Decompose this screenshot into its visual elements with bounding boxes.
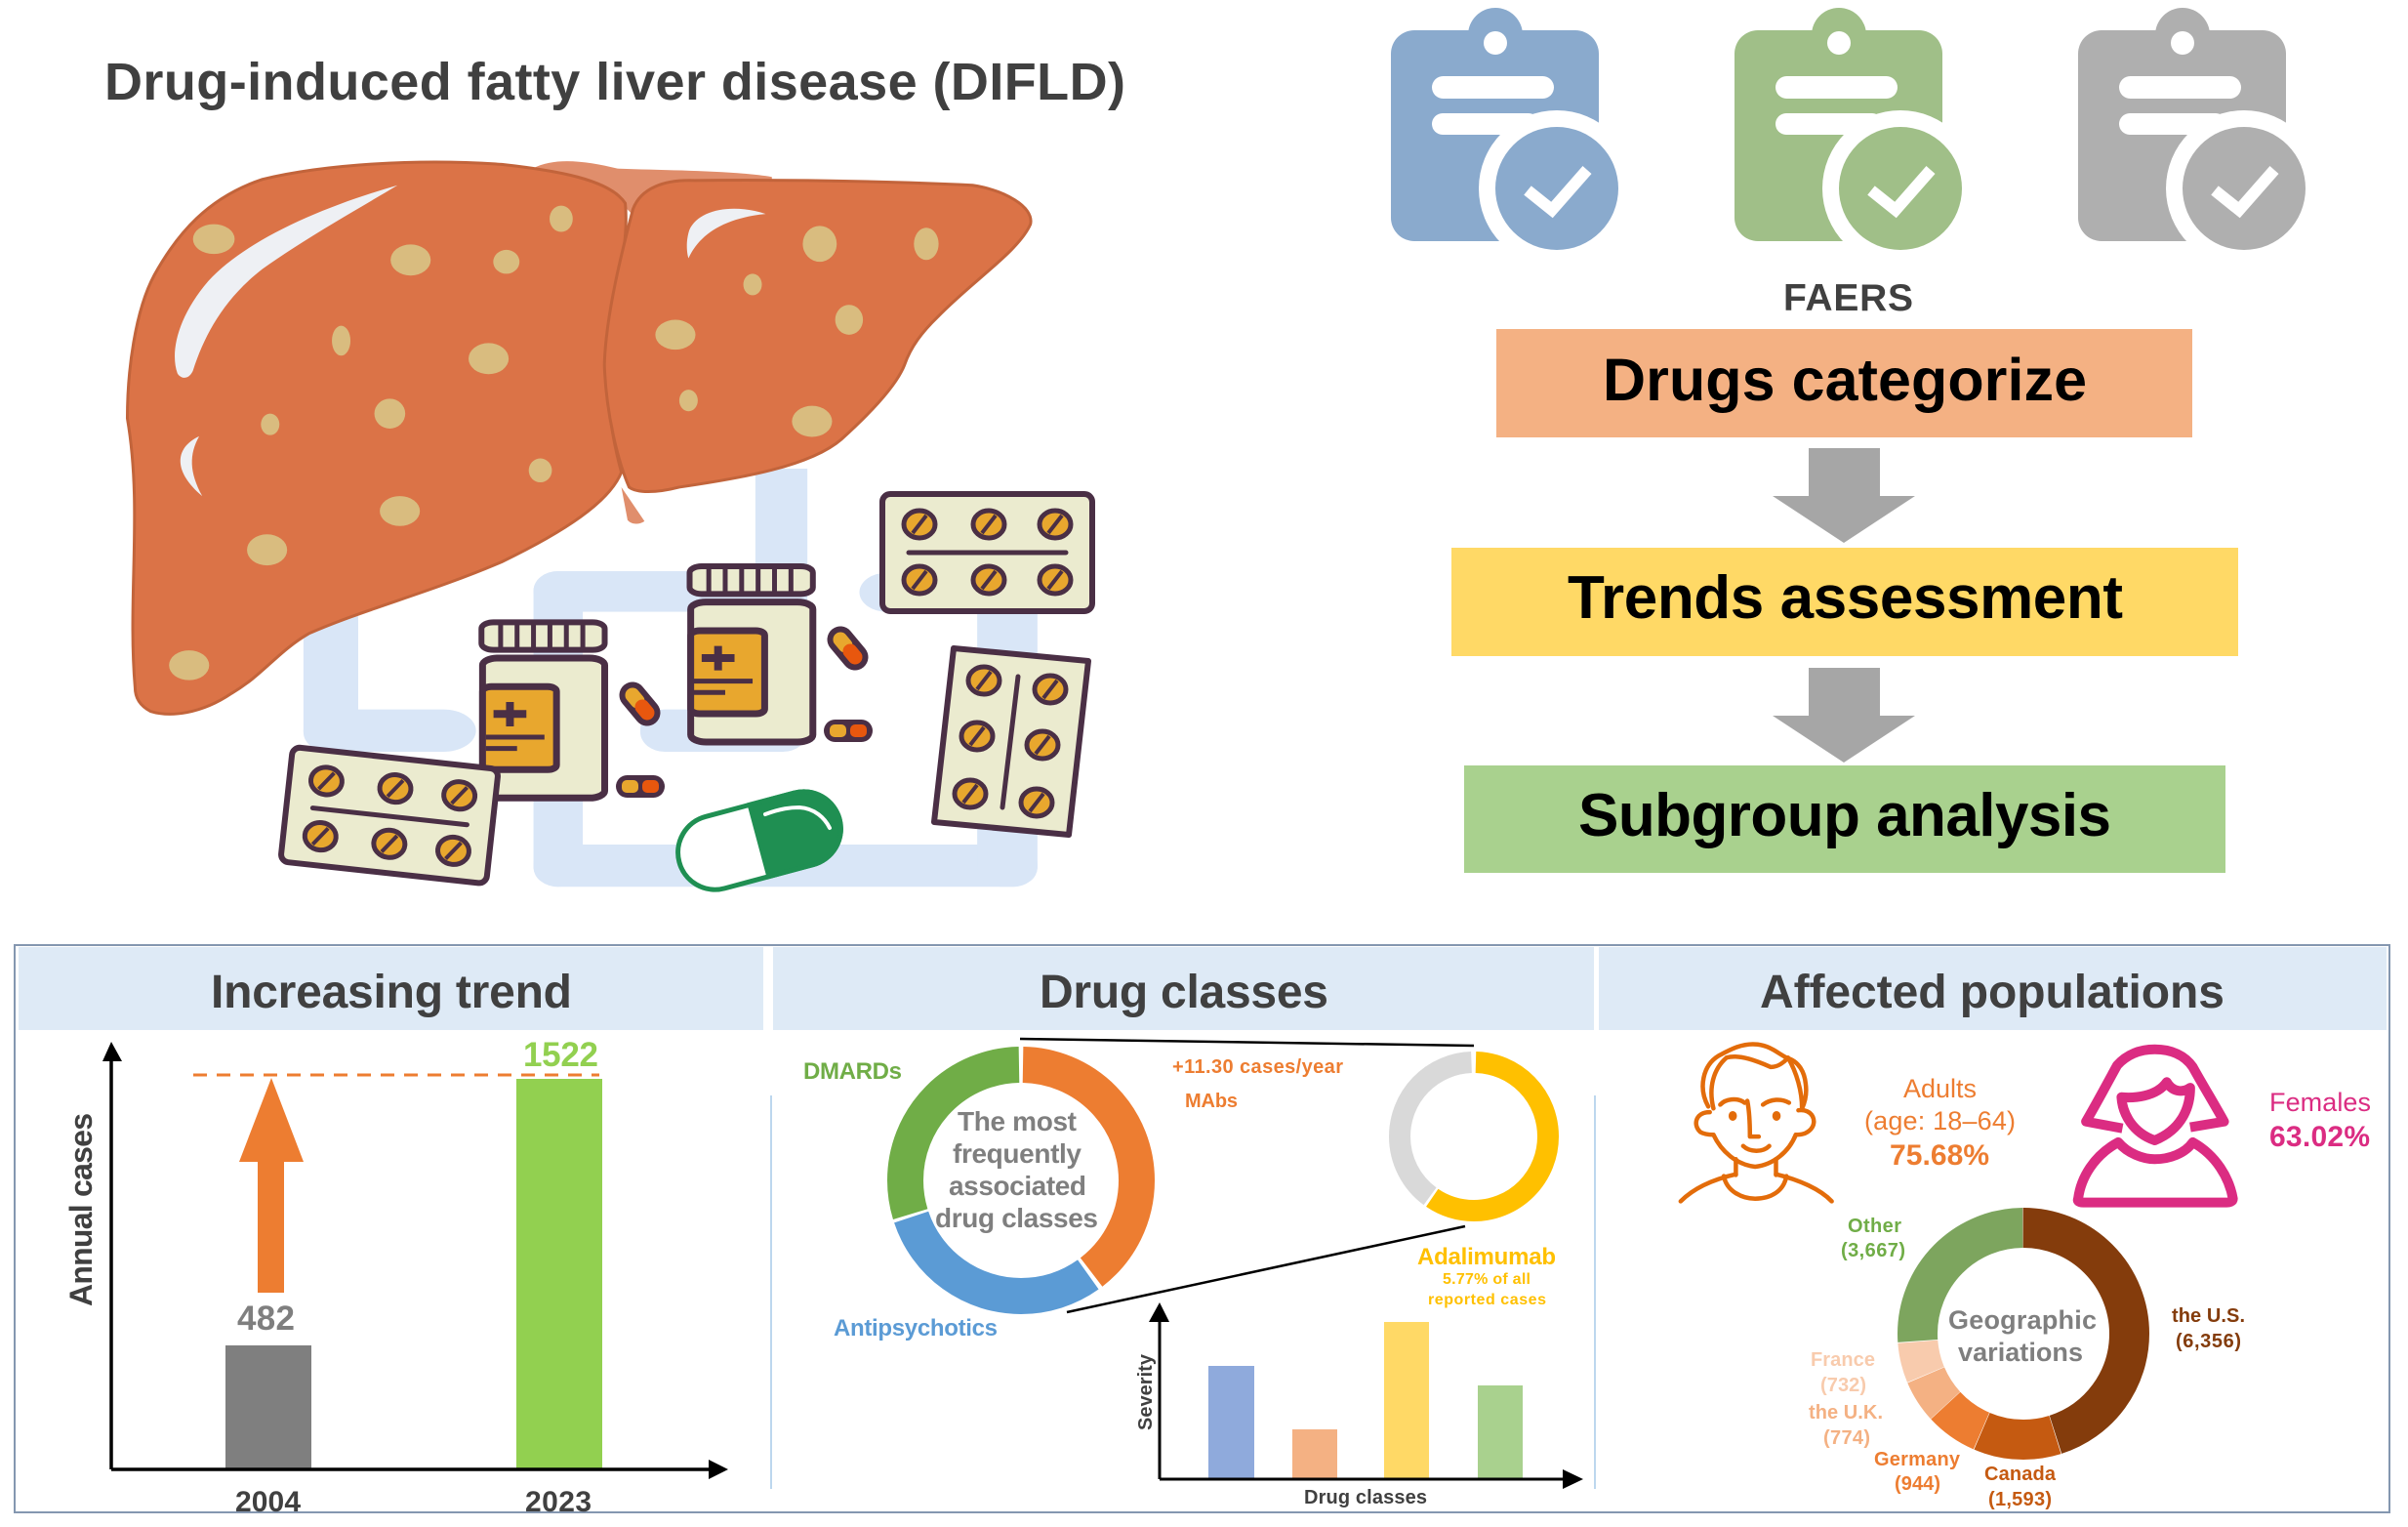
illustration: liver bbox=[127, 161, 1031, 714]
label: France: (732) bbox=[1820, 1375, 1866, 1396]
step: subgroup analysis: Subgroup analysis bbox=[1578, 782, 2111, 849]
heading: affected populations bbox=[1599, 947, 2387, 1030]
donut centre text: geographic variations: Geographic bbox=[1948, 1305, 2097, 1335]
arrow: increase bbox=[239, 1078, 304, 1293]
liver right lobe bbox=[604, 181, 1031, 492]
label: the U.S. bbox=[2172, 1305, 2245, 1352]
icon: medicine bottle left bbox=[481, 622, 605, 798]
donut centre text: associated bbox=[949, 1171, 1086, 1201]
year 2023: 2023 bbox=[525, 1486, 592, 1518]
label: cases per year: +11.30 cases/year bbox=[1172, 1056, 1343, 1078]
label: other: Other bbox=[1848, 1216, 1901, 1237]
axis label: severity: Severity bbox=[1135, 1353, 1157, 1430]
icon: blister pack right bbox=[934, 648, 1088, 835]
donut: adalimumab share bbox=[1400, 1062, 1548, 1211]
heading: drug classes bbox=[773, 947, 1594, 1030]
label: Antipsychotics: Antipsychotics bbox=[834, 1315, 998, 1341]
bar: 2023 bbox=[516, 1079, 602, 1468]
donut centre text: The most bbox=[958, 1106, 1077, 1136]
step: drugs categorize: Drugs categorize bbox=[1603, 347, 2087, 413]
text: adults: (age: 18–64) bbox=[1864, 1106, 2016, 1135]
icon: blue clipboard bbox=[1391, 8, 1635, 267]
icon: adult man bbox=[1681, 1044, 1832, 1201]
liver highlights bbox=[175, 186, 765, 496]
title: Drug-induced fatty liver disease (DIFLD) bbox=[104, 53, 1125, 111]
zoom lines bbox=[1020, 1039, 1474, 1312]
value 482: 482 bbox=[237, 1300, 295, 1338]
icon: medicine bottle centre bbox=[690, 566, 813, 742]
text: adults bbox=[1864, 1074, 2016, 1172]
panel: drug classes bbox=[771, 947, 1595, 1508]
heading: increasing trend: Increasing trend bbox=[211, 967, 572, 1018]
axis label: drug classes: Drug classes bbox=[1304, 1487, 1427, 1508]
label: Adalimumab: reported cases bbox=[1428, 1292, 1546, 1308]
label: France bbox=[1811, 1349, 1875, 1396]
liver ligament bbox=[533, 161, 772, 215]
donut centre text: geographic variations bbox=[1948, 1305, 2097, 1367]
label: Adalimumab: Adalimumab bbox=[1417, 1244, 1556, 1270]
label: the U.K. bbox=[1809, 1402, 1883, 1449]
icon: green capsule bbox=[670, 783, 849, 898]
heading: increasing trend bbox=[19, 947, 763, 1030]
label: France: France bbox=[1811, 1349, 1875, 1371]
label: Adalimumab: 5.77% of all bbox=[1443, 1271, 1531, 1288]
donut: geographic variations bbox=[1917, 1228, 2130, 1439]
text: females: 63.02% bbox=[2269, 1121, 2370, 1153]
step: trends assessment: Trends assessment bbox=[1568, 564, 2123, 632]
arrow: step 1 to step 2 bbox=[1773, 448, 1915, 543]
label: Canada bbox=[1984, 1464, 2057, 1510]
dashed reference line bbox=[193, 1074, 599, 1076]
text: adults: Adults bbox=[1903, 1074, 1977, 1103]
step: subgroup analysis bbox=[1464, 765, 2225, 873]
illustration: background medical frame bbox=[304, 469, 1038, 887]
label: the U.K.: (774) bbox=[1823, 1427, 1870, 1449]
bar: 2004 bbox=[225, 1345, 311, 1468]
label: Germany: (944) bbox=[1895, 1473, 1940, 1495]
text: females: Females bbox=[2269, 1088, 2371, 1117]
heading: drug classes: Drug classes bbox=[1040, 967, 1328, 1018]
panel: increasing trend bbox=[19, 947, 763, 1518]
icon: blister pack top right bbox=[882, 494, 1092, 611]
icon: small capsules bbox=[616, 640, 873, 798]
FAERS label: FAERS bbox=[1783, 277, 1913, 319]
panel: affected populations bbox=[1599, 947, 2387, 1510]
heading: affected populations: Affected populations bbox=[1760, 967, 2224, 1018]
donut centre text: geographic variations: variations bbox=[1958, 1338, 2083, 1367]
label: Adalimumab bbox=[1417, 1244, 1556, 1308]
label: DMARDs: DMARDs bbox=[803, 1058, 902, 1085]
axis label: annual cases: Annual cases bbox=[63, 1113, 99, 1306]
label: the U.S.: the U.S. bbox=[2172, 1305, 2245, 1327]
label: Germany bbox=[1874, 1449, 1961, 1495]
chart axes bbox=[102, 1042, 728, 1479]
panel: outer frame bbox=[15, 945, 2389, 1512]
icon: green clipboard bbox=[1735, 8, 1979, 267]
label: other: (3,667) bbox=[1841, 1240, 1905, 1261]
text: adults: 75.68% bbox=[1890, 1139, 1989, 1172]
arrow: step 2 to step 3 bbox=[1773, 668, 1915, 763]
donut centre text: drug classes bbox=[935, 1203, 1098, 1233]
year 2004: 2004 bbox=[235, 1486, 301, 1518]
donut: most frequent drug classes bbox=[906, 1064, 1136, 1297]
label: other bbox=[1841, 1216, 1905, 1261]
icon: blister pack bottom left bbox=[280, 747, 499, 884]
step: drugs categorize bbox=[1496, 329, 2192, 437]
liver ligament tail bbox=[622, 487, 644, 523]
icon: female bbox=[2078, 1050, 2233, 1203]
icon: gray clipboard bbox=[2078, 8, 2322, 267]
bar chart: severity by drug class bbox=[1149, 1302, 1583, 1489]
label: the U.S.: (6,356) bbox=[2176, 1331, 2241, 1352]
label: Canada: Canada bbox=[1984, 1464, 2057, 1485]
value 1522: 1522 bbox=[523, 1036, 598, 1074]
liver left lobe bbox=[127, 162, 626, 714]
donut centre text: frequently bbox=[953, 1138, 1082, 1169]
liver fat deposits bbox=[169, 206, 939, 681]
label: the U.K.: the U.K. bbox=[1809, 1402, 1883, 1424]
label: MAbs: MAbs bbox=[1185, 1091, 1238, 1112]
step: trends assessment bbox=[1451, 548, 2238, 656]
text: females bbox=[2269, 1088, 2371, 1153]
label: Canada: (1,593) bbox=[1988, 1489, 2052, 1510]
label: Germany: Germany bbox=[1874, 1449, 1961, 1470]
donut centre text bbox=[935, 1106, 1098, 1233]
